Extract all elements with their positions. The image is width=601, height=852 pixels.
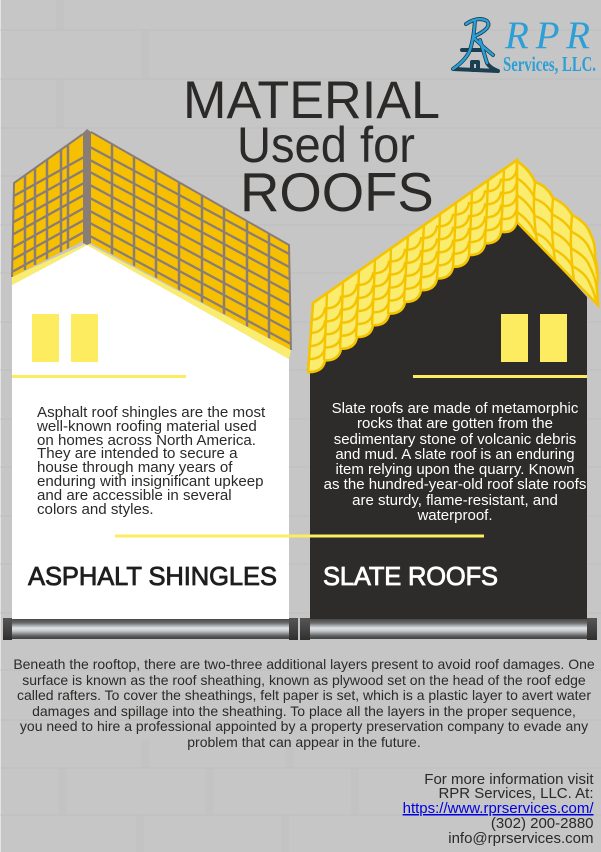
shingle roof right outline [91,132,291,350]
panel: slate roofs house [305,155,601,620]
shingle roof left outline [12,134,83,277]
logo wordmark RPR: RPR [504,14,590,57]
roof ridge [83,129,91,245]
bottom paragraph [13,656,595,750]
shingle roof left slope [13,135,83,276]
bottom paragraph: surface is known as the roof sheathing, known as plywood set on the head of the roof edge [22,672,586,688]
slate description: sedimentary stone of volcanic debris [334,431,576,448]
windows [32,314,98,362]
contact information: https://www.rprservices.com/ [403,800,594,817]
yellow divider [12,375,186,378]
slate roof left outline [308,160,517,372]
panel: asphalt shingles house [10,128,294,620]
asphalt description: Asphalt roof shingles are the most [37,404,266,421]
slate description: and mud. A slate roof is an enduring [335,446,575,463]
asphalt description: on homes across North America. [37,432,256,449]
slate description: waterproof. [416,507,493,524]
contact information: info@rprservices.com [448,830,594,847]
slate roof right outline [517,161,598,305]
slate description: as the hundred-year-old roof slate roofs [324,476,586,493]
contact information: (302) 200-2880 [491,815,594,832]
logo: RPR Services, LLC. [453,14,596,76]
contact information: RPR Services, LLC. At: [438,785,594,802]
asphalt description: They are intended to secure a [37,445,238,462]
slate roof right slope [518,164,596,302]
asphalt description: colors and styles. [37,501,154,518]
shingle roof right slope [88,128,294,354]
white house body [12,245,289,620]
asphalt description: house through many years of [37,459,233,476]
bottom paragraph: damages and spillage into the sheathing. To place all the layers in the proper sequence, [32,703,576,719]
bottom paragraph: you need to hire a professional appointed by a property preservation company to evade any [20,718,588,734]
yellow divider [413,375,587,378]
dark house body [310,220,587,620]
bottom paragraph: called rafters. To cover the sheathings, felt paper is set, which is a plastic layer to avert water [17,687,591,703]
logo house icon [453,19,498,71]
roof fascia [12,243,291,359]
title [183,71,440,223]
title line: MATERIAL: MATERIAL [183,71,440,130]
title line: Used for: Used for [237,117,415,173]
center yellow divider [115,534,484,538]
slate description: Slate roofs are made of metamorphic [332,400,579,417]
slate description: item relying upon the quarry. Known [335,461,575,478]
asphalt description [36,404,266,518]
rail right [300,618,597,640]
contact information: For more information visit [424,771,594,788]
title line: ROOFS: ROOFS [240,162,434,223]
windows [501,314,567,362]
bottom paragraph: Beneath the rooftop, there are two-three additional layers present to avoid roof damages. One [13,656,595,672]
asphalt heading: ASPHALT SHINGLES [28,563,277,591]
asphalt description: enduring with insignificant upkeep [37,473,264,490]
asphalt description: and are accessible in several [37,487,232,504]
slate heading: SLATE ROOFS [323,563,498,591]
slate roof left slope [309,162,516,371]
contact information [403,771,594,847]
asphalt description: well-known roofing material used [36,418,257,435]
bottom paragraph: problem that can appear in the future. [187,734,421,750]
slate description [324,400,586,524]
rail left [3,618,298,640]
slate description: rocks that are gotten from the [357,415,553,432]
slate description: are sturdy, flame-resistant, and [352,492,558,509]
